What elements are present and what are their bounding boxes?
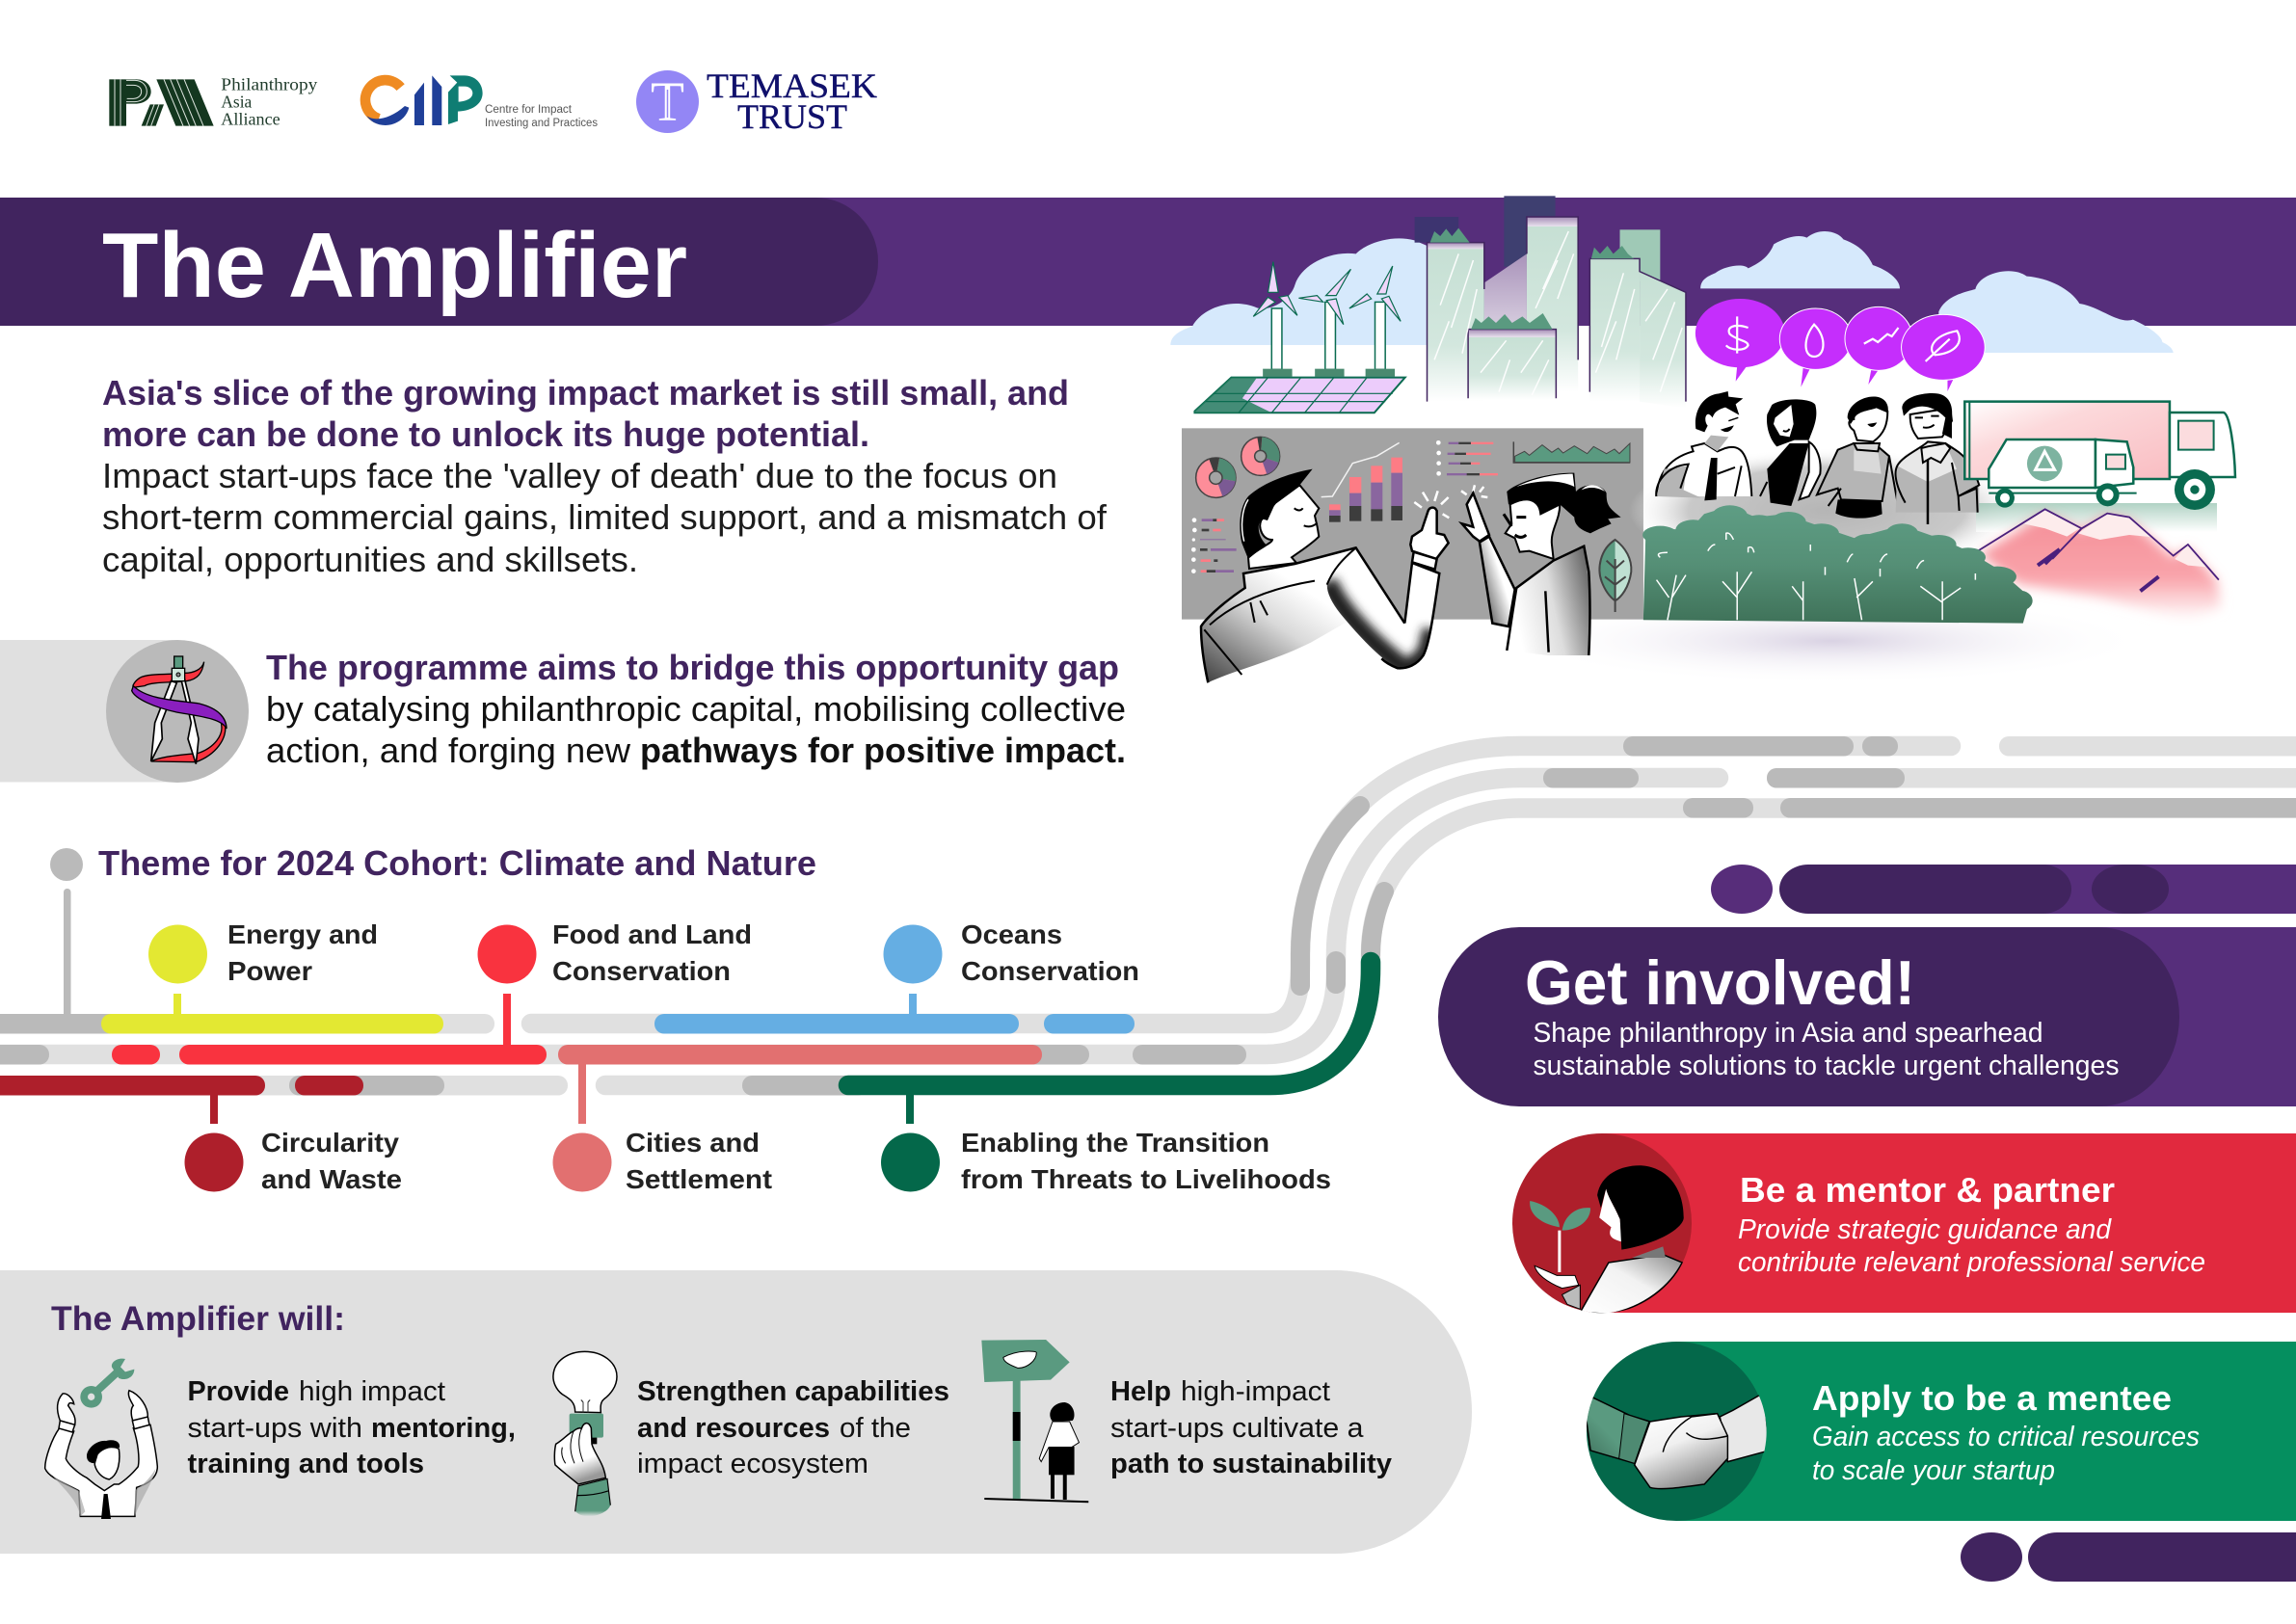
heading: Apply to be a mentee [1812,1378,2172,1418]
wind turbines and solar panel [1194,262,1405,413]
text: help: start-ups cultivate a [1110,1413,1364,1444]
Energy and Power line [101,994,443,1033]
subtext [1533,1018,2119,1081]
icon: woman holding seedling [1530,1165,1684,1314]
programme text: pathways for positive impact. [640,731,1126,770]
title: The Amplifier [102,214,687,317]
text: help: Help [1110,1376,1171,1407]
person 3 [1817,396,1897,519]
text: help: high-impact [1181,1376,1330,1407]
logo: Temasek Trust: TRUST [737,97,847,136]
text: provide: Provide [187,1376,289,1407]
subtext: Gain access to critical resources [1812,1422,2200,1452]
legend: Cities and Settlement: Cities and [626,1128,760,1158]
intro text: Asia's slice of the growing impact market is still small, and [102,373,1069,413]
intro text: short-term commercial gains, limited support, and a mismatch of [102,497,1108,537]
legend: Cities and Settlement: Settlement [626,1164,772,1194]
subtext: Shape philanthropy in Asia and spearhead [1533,1018,2043,1049]
text: strengthen: and resources [637,1413,830,1444]
text: strengthen: impact ecosystem [637,1449,868,1479]
logo: Philanthropy Asia Alliance: Alliance [221,110,280,129]
logo: Centre for Impact Investing and Practices: Centre for Impact [485,104,573,116]
subtext [1738,1214,2205,1278]
legend: Enabling the Transition [881,1128,1331,1194]
Cities and Settlement line [558,1045,1042,1124]
legend: Enabling the Transition: from Threats to Livelihoods [961,1164,1331,1194]
text: provide: training and tools [187,1449,424,1479]
text: strengthen [637,1376,949,1479]
text: provide: high impact [299,1376,445,1407]
text: strengthen: Strengthen capabilities [637,1376,949,1407]
woman pointing [1462,473,1621,655]
icon: signpost and woman [981,1340,1088,1502]
Circularity and Waste line [0,1076,363,1124]
speech bubbles [1695,299,1985,391]
logo: Temasek Trust: T [651,70,684,133]
legend lists [1191,440,1498,573]
legend: Energy and Power: Power [227,956,312,986]
leaf [1599,540,1631,612]
panel: Be a mentor and partner [1512,1133,2296,1314]
programme text: action, and forging new [266,731,631,770]
grey overlays [0,736,2296,1095]
text: provide: start-ups with [187,1413,362,1444]
icon: man catching wrench [45,1359,157,1519]
logo: Temasek Trust [636,67,877,136]
intro text: Impact start-ups face the 'valley of death' due to the focus on [102,456,1057,495]
area chart [1513,441,1630,463]
text: help [1110,1376,1392,1479]
legend: Circularity and Waste [185,1128,402,1194]
person 1 [1656,391,1751,500]
subtext: Provide strategic guidance and [1738,1214,2112,1245]
logos [109,67,877,136]
legend: Energy and Power [148,919,378,986]
forest [1642,505,2033,624]
text: strengthen: of the [840,1413,911,1444]
data board with two analysts [1182,428,1643,682]
decorative purple pills bottom [1961,1532,2296,1582]
legend: Circularity and Waste: and Waste [261,1164,402,1194]
Oceans Conservation line [654,994,1135,1033]
man pointing [1201,469,1449,682]
bar chart [1322,442,1402,522]
logo: Centre for Impact Investing and Practices [365,75,598,129]
icon: compass with ribbon [132,656,227,764]
clouds [1170,231,2174,353]
programme text: The programme aims to bridge this opportunity gap [266,648,1119,687]
programme text: by catalysing philanthropic capital, mobilising collective [266,689,1126,729]
legend: Cities and Settlement [553,1128,772,1194]
legend: Enabling the Transition: Enabling the Transition [961,1128,1269,1158]
legend: Oceans Conservation: Oceans [961,919,1062,949]
crowd shadow [1629,448,2024,573]
person 4 [1896,393,1979,524]
subtext: contribute relevant professional service [1738,1247,2205,1278]
legend: Circularity and Waste: Circularity [261,1128,399,1158]
mountains [1975,509,2221,620]
legend: Food and Land Conservation: Conservation [552,956,731,986]
panel: Get involved [1438,927,2296,1106]
text: provide: mentoring, [371,1413,516,1444]
legend: Energy and Power: Energy and [227,919,378,949]
panel: The Amplifier will [0,1270,1472,1554]
subtext: to scale your startup [1812,1455,2055,1486]
pie charts [1196,437,1280,497]
purple haze under scene [1513,598,2149,684]
recycling trucks [1964,402,2235,510]
person 2 [1760,399,1821,506]
green ground under trucks [1976,503,2217,532]
text: provide [187,1376,516,1479]
city buildings [1415,196,1686,408]
heading: Get involved! [1525,947,1915,1018]
header band [0,198,2296,326]
legend: Oceans Conservation: Conservation [961,956,1139,986]
subtext [1812,1422,2200,1486]
legend: Food and Land Conservation: Food and Land [552,919,752,949]
legend: Oceans Conservation [883,919,1139,986]
Food and Land Conservation line [112,994,547,1064]
panel heading: The Amplifier will: [51,1300,345,1338]
sparkles [1414,485,1487,518]
logo: Philanthropy Asia Alliance [109,75,317,129]
legend: Food and Land Conservation [478,919,752,986]
Enabling the Transition line [848,962,1371,1124]
programme text [266,648,1126,770]
intro text: more can be done to unlock its huge potential. [102,414,869,454]
decorative purple pills top [1711,865,2296,914]
subtext: sustainable solutions to tackle urgent challenges [1533,1051,2119,1081]
light base tracks [0,736,2296,1095]
panel: Apply to be a mentee [1583,1342,2296,1521]
intro text [102,373,1108,579]
heading: Be a mentor & partner [1740,1170,2115,1210]
heading: theme for 2024 cohort [50,843,816,1019]
heading: theme for 2024 cohort: Theme for 2024 Cohort: Climate and Nature [98,843,816,883]
text: help: path to sustainability [1110,1449,1392,1479]
panel: programme aim [0,640,1126,783]
four people [1656,391,2235,524]
logo: Centre for Impact Investing and Practices: Investing and Practices [485,118,598,129]
chart: theme pathway tracks [0,736,2296,1124]
icon: handshake [1583,1393,1769,1489]
logo: Temasek Trust: TEMASEK [707,67,877,105]
logo: Philanthropy Asia Alliance: Philanthropy [221,75,317,94]
intro text: capital, opportunities and skillsets. [102,540,638,579]
icon: light bulb in hand [553,1351,617,1516]
logo: Philanthropy Asia Alliance: Asia [221,93,252,112]
illustration: city, people and nature [1170,196,2235,684]
